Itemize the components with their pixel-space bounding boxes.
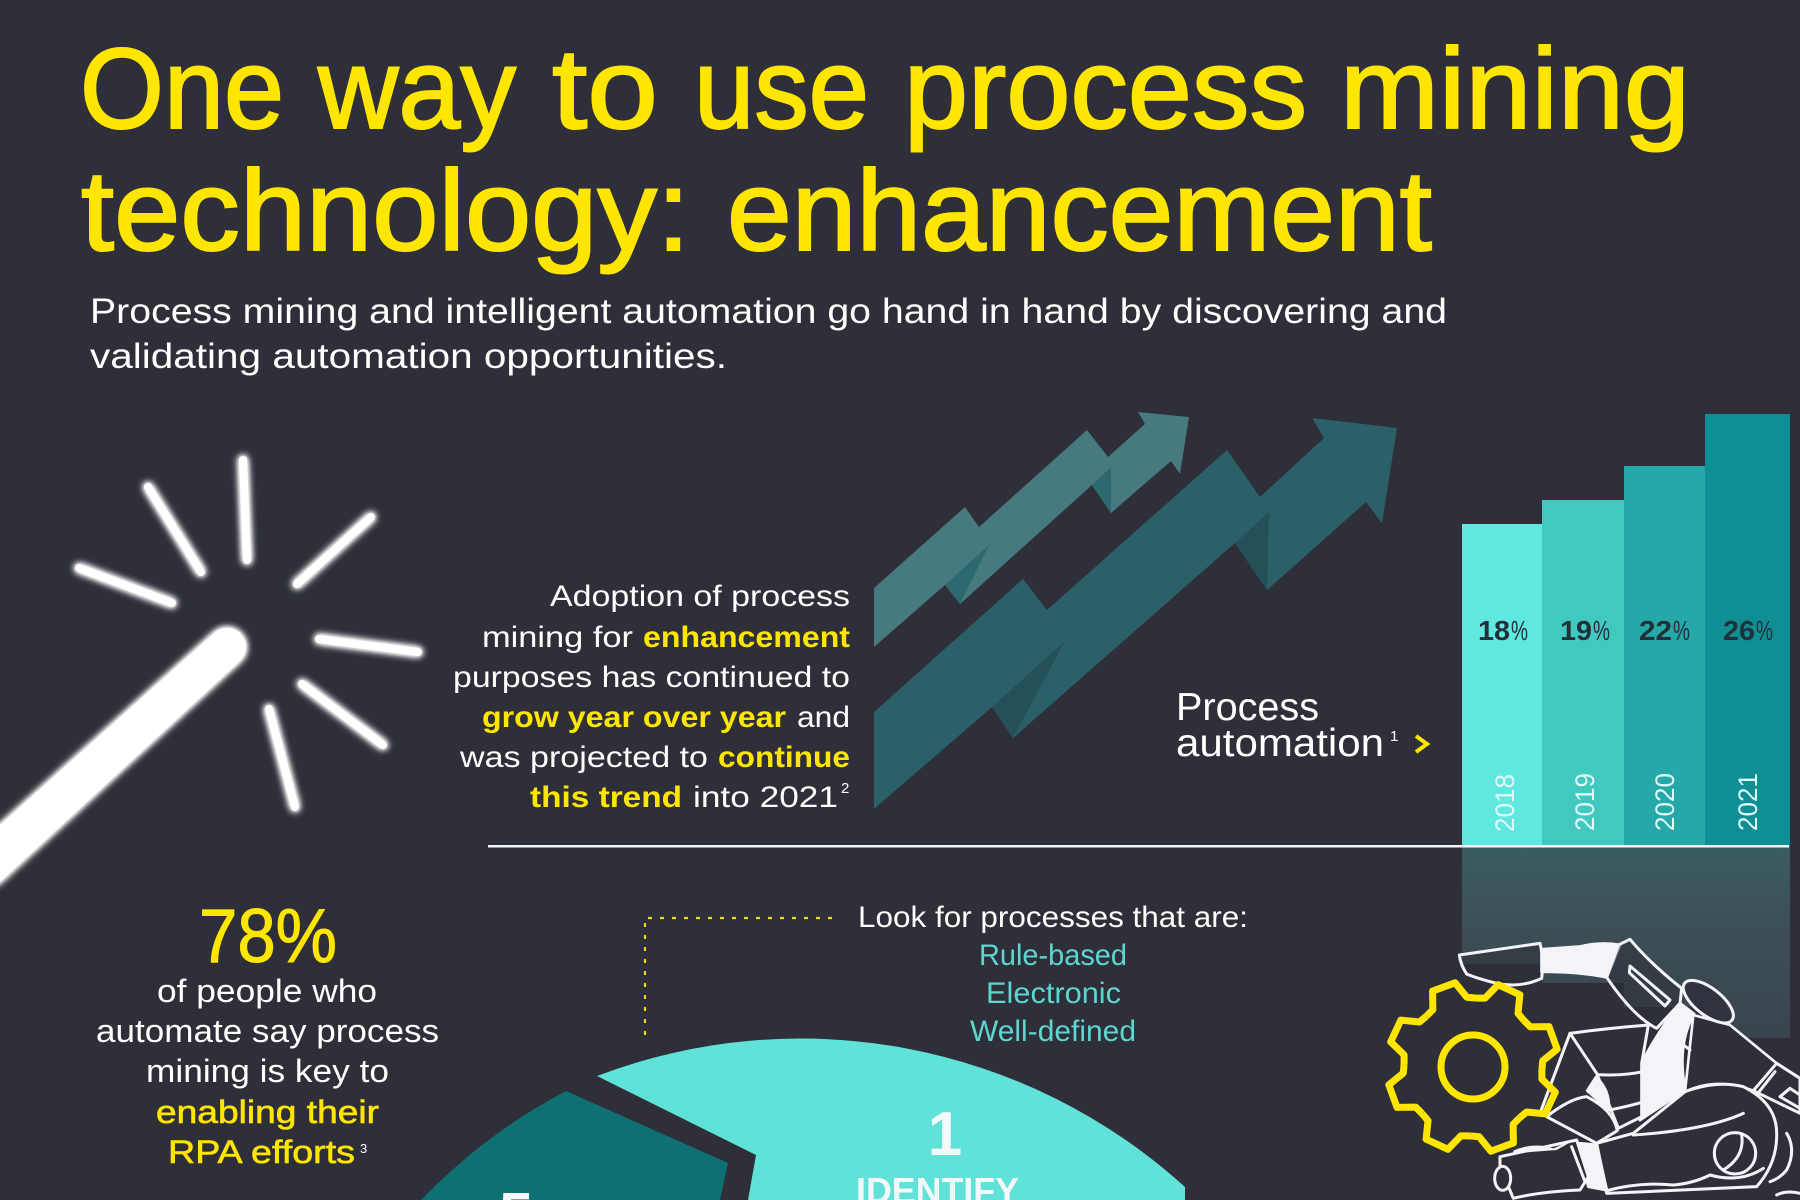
- text: adoption of process mining: purposes has continued to: [453, 661, 850, 694]
- text: adoption of process mining: continue: [718, 741, 850, 774]
- bar years: 2021: [1733, 773, 1763, 831]
- bar values: 22: [1639, 615, 1672, 646]
- bar values: %: [1593, 615, 1610, 646]
- icon: robot hand: [1459, 939, 1800, 1198]
- bar values: %: [1511, 615, 1528, 646]
- text: adoption of process mining: 2: [841, 780, 849, 797]
- text: adoption of process mining: this trend: [530, 781, 682, 814]
- title: One: [80, 26, 284, 153]
- pie segment 5: [421, 1091, 728, 1200]
- title: use: [694, 26, 869, 153]
- stat: 78 percent: enabling their: [156, 1094, 379, 1130]
- label: process automation: [1176, 686, 1398, 765]
- bar years: 2020: [1650, 773, 1680, 831]
- bar values: 19: [1560, 615, 1592, 646]
- bar years: 2018: [1490, 774, 1520, 832]
- text: adoption of process mining: [453, 580, 850, 814]
- title: to: [552, 26, 658, 153]
- icon: yellow chevron: [1416, 736, 1427, 752]
- text: look for processes: Look for processes that are:: [858, 901, 1248, 934]
- bar chart: process automation by year: [1462, 414, 1790, 846]
- text: adoption of process mining: mining for: [482, 621, 633, 654]
- segment 1 number: 1: [928, 1100, 962, 1169]
- label: process automation: 1: [1390, 728, 1398, 745]
- stat: 78 percent: 78%: [199, 894, 337, 979]
- stat: 78 percent: automate say process: [96, 1013, 439, 1049]
- bar values: [1478, 615, 1773, 646]
- dotted connector: [645, 918, 832, 1042]
- title: process: [904, 26, 1307, 153]
- stat: 78 percent: 3: [360, 1141, 367, 1156]
- stat: 78 percent: of people who: [157, 973, 377, 1009]
- stat: 78 percent: RPA efforts: [168, 1134, 355, 1170]
- subtitle: Process mining and intelligent automation go hand in hand by discovering and: [90, 292, 1447, 331]
- bar years: [1490, 773, 1763, 832]
- icon: magic wand with sparks: [0, 460, 418, 900]
- title: enhancement: [727, 148, 1432, 275]
- bar values: %: [1673, 615, 1690, 646]
- text: adoption of process mining: was projected to: [459, 741, 708, 774]
- title: technology:: [81, 148, 690, 275]
- title: [80, 26, 1690, 275]
- label: process automation: automation: [1176, 722, 1384, 765]
- bar values: 26: [1723, 615, 1755, 646]
- bar values: %: [1756, 615, 1773, 646]
- text: look for processes: Rule-based: [979, 939, 1127, 972]
- subtitle: [90, 292, 1447, 376]
- icon: lower growth arrow: [874, 418, 1397, 809]
- title: mining: [1340, 26, 1690, 153]
- text: adoption of process mining: enhancement: [643, 621, 850, 654]
- title: way: [317, 26, 516, 153]
- text: look for processes: Well-defined: [970, 1015, 1136, 1048]
- bar values: 18: [1478, 615, 1510, 646]
- text: look for processes: [858, 901, 1248, 1048]
- pie segment 1: identify: [597, 1039, 1185, 1200]
- text: adoption of process mining: into 2021: [693, 781, 838, 814]
- stat: 78 percent: [96, 894, 439, 1170]
- text: adoption of process mining: and: [797, 701, 850, 734]
- bar years: 2019: [1570, 773, 1600, 831]
- stat: 78 percent: mining is key to: [146, 1053, 389, 1089]
- bar reflection: [1462, 846, 1790, 1038]
- label: process automation: Process: [1176, 686, 1319, 729]
- text: adoption of process mining: Adoption of process: [550, 580, 850, 613]
- icon: upper growth arrow: [874, 412, 1189, 647]
- icon: yellow gear: [1384, 978, 1562, 1156]
- subtitle: validating automation opportunities.: [90, 337, 727, 376]
- text: look for processes: Electronic: [986, 977, 1121, 1010]
- text: adoption of process mining: grow year over year: [482, 701, 786, 734]
